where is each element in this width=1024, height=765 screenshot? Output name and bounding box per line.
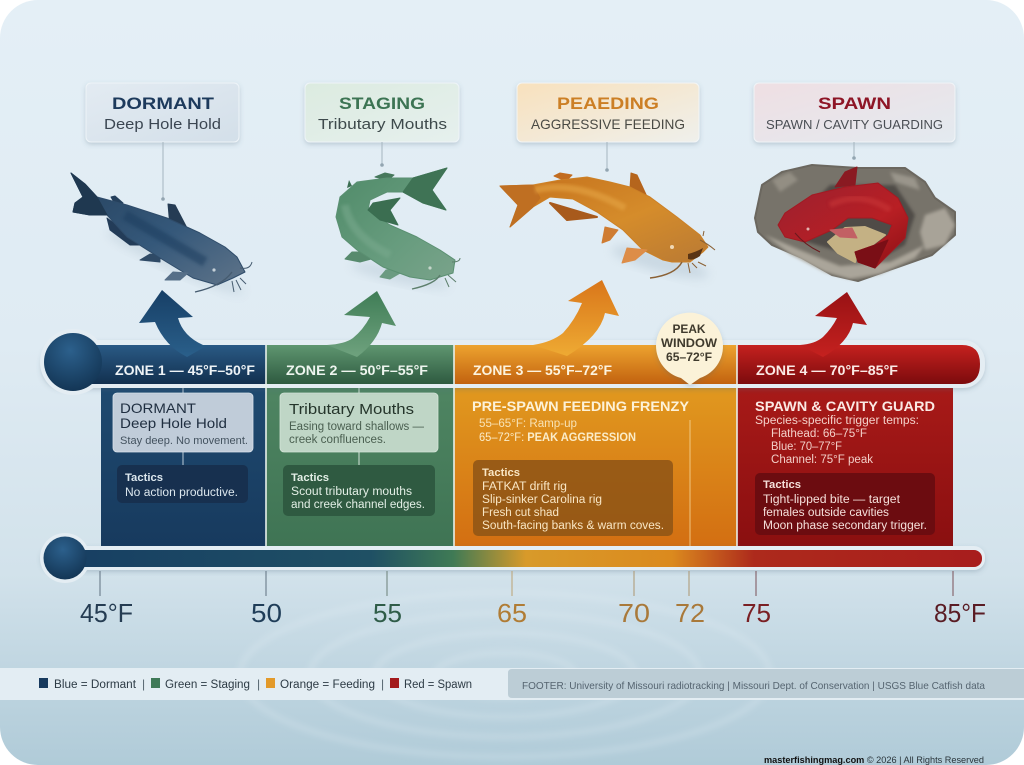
label: spawn [754,83,955,160]
label: dormant: DORMANT [112,94,215,113]
panel: zone 1 dormant [101,386,266,546]
zone temperature bar [40,329,985,546]
legend band: | [142,677,145,691]
arrow: blue [139,290,208,357]
staging tactics box: Tactics [291,472,329,484]
scale label 65: 65 [497,598,527,628]
arrow: red [800,292,867,357]
scale ticks [100,571,953,596]
dormant info box [113,393,253,452]
feeding tactics box: Tactics [482,467,520,479]
legend band: | [257,677,260,691]
staging tactics box: and creek channel edges. [291,499,425,511]
scale label 70: 70 [618,598,650,628]
spawn tactics box: females outside cavities [763,507,889,519]
dormant tactics box: Tactics [125,472,163,484]
panel: zone 2 staging [266,386,454,546]
feeding temperature notes [479,418,636,444]
dormant info box: Stay deep. No movement. [120,435,248,447]
feeding tactics box: FATKAT drift rig [482,481,567,493]
label: staging: Tributary Mouths [318,116,447,133]
arrow: orange [533,280,619,356]
label: staging: STAGING [339,94,425,113]
scale label 85F: 85°F [934,598,986,628]
dormant tactics box: No action productive. [125,487,238,499]
icon: blue catfish [71,173,252,301]
label: staging [305,83,459,167]
label: feeding [517,83,699,172]
scale label 72: 72 [675,598,705,628]
spawn tactics box: Tight-lipped bite — target [763,494,901,506]
dormant tactics box [117,465,248,503]
zone 2 label: ZONE 2 — 50°F–55°F [286,363,428,378]
spawn tactics box: Tactics [763,479,801,491]
spawn trigger temps: Blue: 70–77°F [771,441,842,453]
label: spawn: SPAWN [818,94,891,113]
temperature scale bar [40,533,985,583]
legend band: | [381,677,384,691]
scale label 55: 55 [373,598,402,628]
icon: orange catfish [500,173,715,285]
callout: peak window: PEAK [672,324,706,336]
feeding tactics box: South-facing banks & warm coves. [482,520,664,532]
icon: green catfish [336,168,460,293]
legend band [0,668,1024,700]
spawn trigger temps: Channel: 75°F peak [771,454,873,466]
label: feeding: AGGRESSIVE FEEDING [531,116,685,132]
dormant info box: DORMANT [120,400,196,416]
label: dormant: Deep Hole Hold [104,116,221,133]
spawn heading: SPAWN & CAVITY GUARD [755,398,935,414]
spawn trigger temps: Species-specific trigger temps: [755,415,919,427]
callout: peak window: 65–72°F [666,352,712,364]
staging info box: Tributary Mouths [289,401,414,418]
staging info box: creek confluences. [289,434,386,446]
footer sources [508,669,1024,698]
feeding tactics box [473,460,673,536]
spawn tactics box [755,473,935,535]
zone 4 label: ZONE 4 — 70°F–85°F [756,363,898,378]
legend band: Red = Spawn [404,679,472,691]
scale label 75: 75 [742,598,771,628]
feeding heading: PRE-SPAWN FEEDING FRENZY [472,398,690,414]
icon: red catfish in cavity [755,165,955,281]
legend band: Green = Staging [165,679,250,691]
zone 3 label: ZONE 3 — 55°F–72°F [473,363,612,378]
feeding temperature notes: 65–72°F: PEAK AGGRESSION [479,432,636,444]
spawn trigger temps [755,415,919,466]
footer sources: FOOTER: University of Missouri radiotracking | Missouri Dept. of Conservation | USGS Blue Catfish data [522,680,985,692]
spawn trigger temps: Flathead: 66–75°F [771,428,867,440]
label: dormant [86,83,239,201]
callout: peak window [656,313,723,385]
staging info box [280,393,438,452]
feeding temperature notes: 55–65°F: Ramp-up [479,418,577,430]
legend band: Orange = Feeding [280,679,375,691]
staging tactics box [283,465,435,516]
callout: peak window: WINDOW [661,338,717,350]
scale label 45F: 45°F [80,598,133,628]
panel: zone 3 feeding [454,386,737,546]
legend band: Blue = Dormant [54,679,137,691]
dormant info box: Deep Hole Hold [120,415,227,431]
arrow: green [327,291,396,357]
spawn tactics box: Moon phase secondary trigger. [763,520,927,532]
label: feeding: PEAEDING [557,94,659,113]
feeding tactics box: Slip-sinker Carolina rig [482,494,602,506]
panel: zone 4 spawn [737,386,953,546]
label: spawn: SPAWN / CAVITY GUARDING [766,117,943,132]
staging info box: Easing toward shallows — [289,421,424,433]
scale label 50: 50 [251,598,282,628]
staging tactics box: Scout tributary mouths [291,486,412,498]
zone 1 label: ZONE 1 — 45°F–50°F [115,363,255,378]
feeding tactics box: Fresh cut shad [482,507,559,519]
